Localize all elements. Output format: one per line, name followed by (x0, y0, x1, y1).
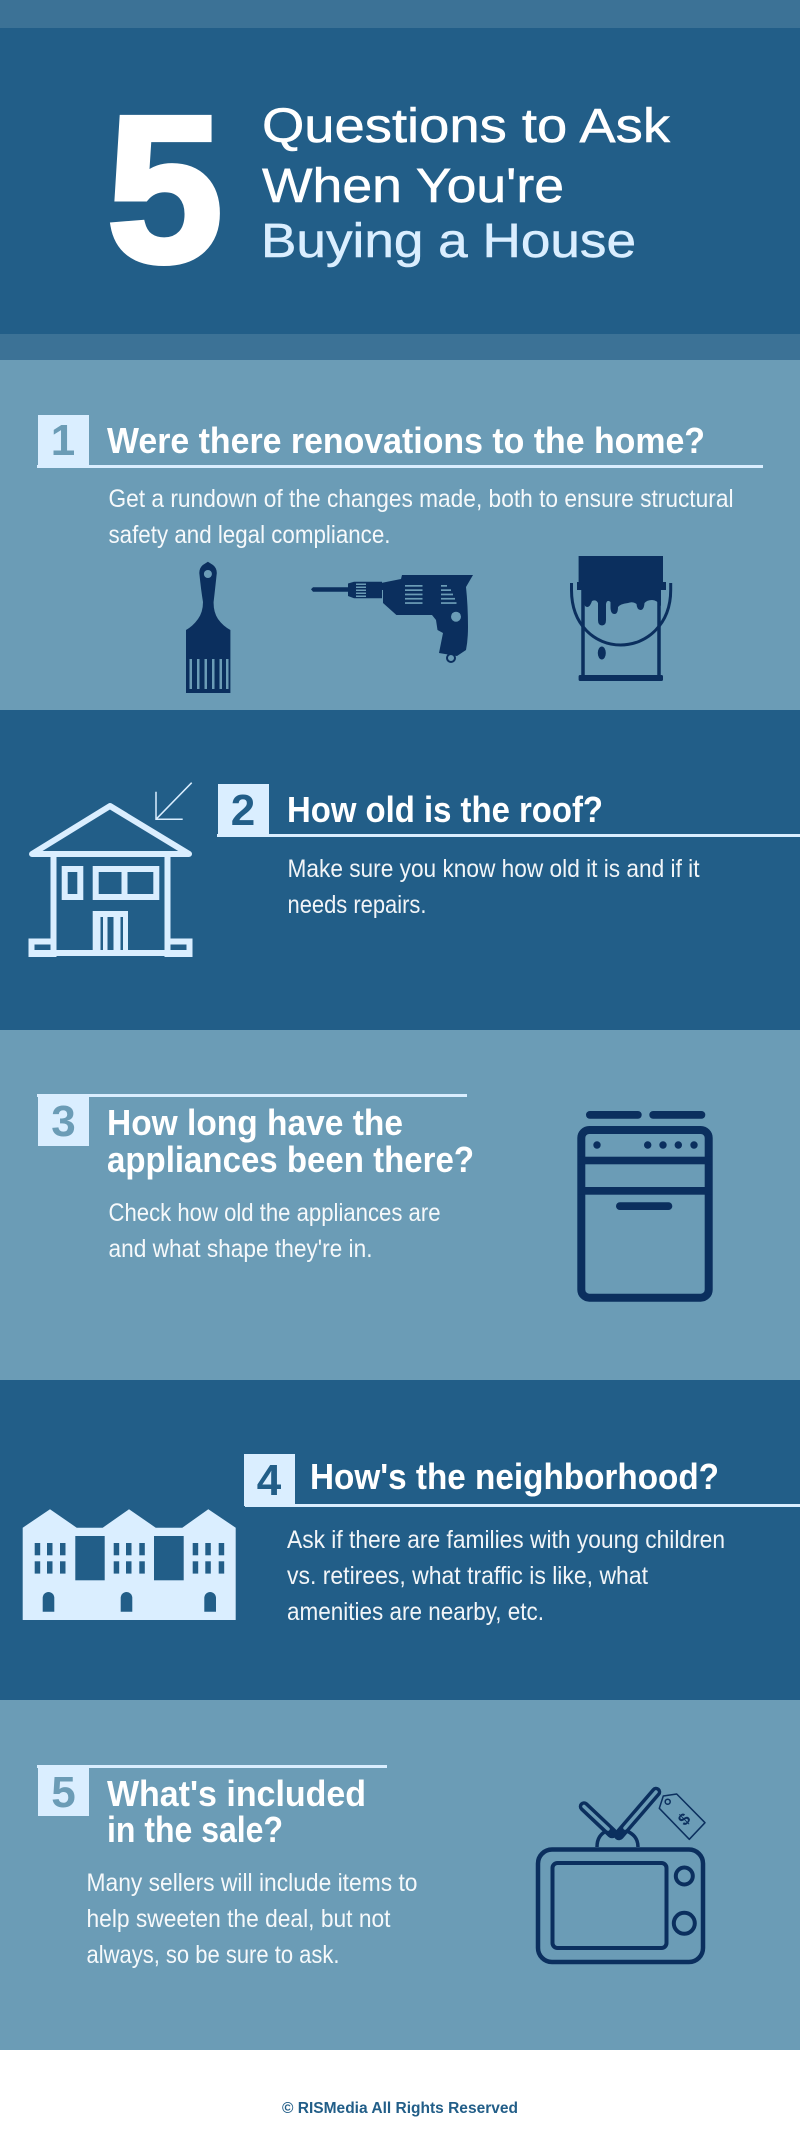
icon: power drill (311, 575, 473, 662)
body text 5: Many sellers will include items to (86, 1869, 418, 1897)
title (261, 100, 671, 268)
heading 3: How long have the (107, 1102, 403, 1143)
body text 5 (86, 1869, 418, 1969)
panel: header (0, 0, 800, 360)
footer (0, 2050, 800, 2150)
number badge 2: 2 (231, 786, 255, 835)
body text 1: Get a rundown of the changes made, both to ensure structural (108, 485, 734, 513)
icon: stove (578, 1111, 712, 1298)
body text 1: safety and legal compliance. (108, 521, 390, 549)
heading underline 2 (217, 834, 800, 837)
body text 3 (108, 1199, 440, 1263)
copyright line: © RISMedia All Rights Reserved (282, 2100, 518, 2117)
title: Questions to Ask (262, 100, 671, 153)
title: Buying a House (261, 215, 636, 268)
number badge 4: 4 (257, 1456, 282, 1505)
body text 3: Check how old the appliances are (108, 1199, 440, 1227)
heading underline 3 (37, 1094, 467, 1097)
body text 5: help sweeten the deal, but not (86, 1905, 391, 1933)
heading underline 5 (37, 1765, 387, 1768)
heading 4: How's the neighborhood? (310, 1456, 719, 1497)
icon: television with price tag (538, 1792, 705, 1962)
number badge 5 (38, 1766, 89, 1817)
body text 4: vs. retirees, what traffic is like, what (287, 1562, 648, 1590)
body text 4: Ask if there are families with young children (287, 1526, 725, 1554)
panel: question 1 renovations (0, 360, 800, 710)
number badge 1 (38, 415, 89, 467)
heading 5 (107, 1773, 366, 1850)
heading 5: in the sale? (107, 1809, 283, 1850)
body text 1 (108, 485, 734, 549)
number badge 4 (244, 1454, 295, 1506)
body text 4: amenities are nearby, etc. (287, 1598, 544, 1626)
heading underline 4 (245, 1504, 800, 1507)
price tag dollar sign: $ (674, 1809, 695, 1829)
body text 3: and what shape they're in. (108, 1235, 372, 1263)
body text 2: needs repairs. (288, 891, 426, 919)
panel: question 2 roof (0, 710, 800, 1030)
icon: house (32, 806, 190, 954)
number badge 2 (218, 784, 269, 836)
heading 3: appliances been there? (107, 1139, 474, 1180)
number badge 3: 3 (51, 1097, 76, 1146)
arrow: pointing to roof (156, 783, 192, 819)
panel: question 5 included items (0, 1700, 800, 2050)
heading 5: What's included (107, 1773, 366, 1814)
big number 5: 5 (107, 74, 223, 306)
heading 2: How old is the roof? (287, 789, 603, 830)
body text 4 (287, 1526, 725, 1626)
number badge 5: 5 (51, 1768, 76, 1817)
title: When You're (262, 160, 564, 213)
heading 3 (107, 1102, 474, 1180)
icon: paint can (572, 556, 671, 681)
icon: paint brush (186, 562, 230, 693)
panel: question 3 appliances (0, 1030, 800, 1380)
number badge 1: 1 (51, 416, 75, 465)
heading 1: Were there renovations to the home? (107, 420, 705, 461)
body text 5: always, so be sure to ask. (86, 1941, 340, 1969)
body text 2 (288, 855, 700, 919)
body text 2: Make sure you know how old it is and if it (288, 855, 700, 883)
heading underline 1 (37, 465, 763, 468)
panel: question 4 neighborhood (0, 1380, 800, 1700)
icon: row of townhouses (23, 1509, 236, 1620)
number badge 3 (38, 1095, 89, 1146)
